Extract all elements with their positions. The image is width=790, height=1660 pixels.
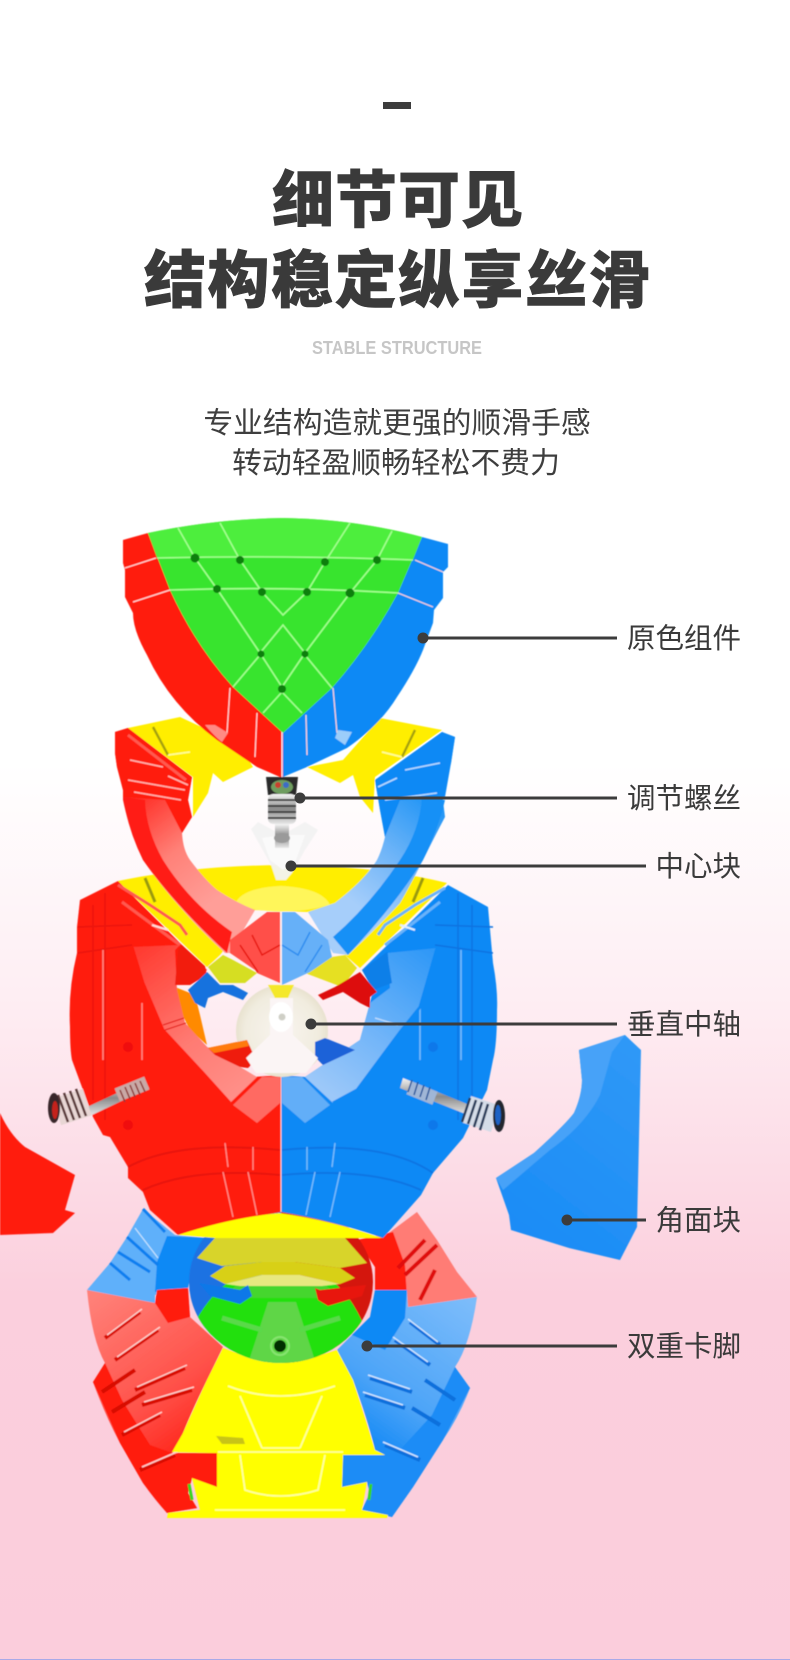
lower centre blocks: [233, 1077, 280, 1123]
right curved band: [305, 948, 437, 1103]
red side: [123, 533, 283, 777]
adjusting screw: [266, 777, 298, 848]
callout: corner block: [562, 1198, 741, 1239]
blue body half: [281, 885, 497, 1238]
yellow top dome: [118, 865, 447, 968]
callout: double clip: 双重卡脚: [627, 1324, 741, 1365]
green face: [148, 518, 422, 733]
blue side: [283, 537, 448, 777]
heading line 1: 细节可见: [272, 150, 524, 240]
red arc: [115, 728, 255, 953]
olive plates: [197, 1238, 367, 1268]
blue clip cross: [188, 972, 248, 1008]
blue upper-left wedge: [87, 1209, 208, 1303]
red head highlights: [128, 760, 188, 800]
yellow left arm: [128, 717, 253, 817]
accent dash: [383, 102, 411, 109]
red body half: [70, 881, 281, 1235]
left screw: [48, 1077, 149, 1125]
blue head highlights: [378, 763, 440, 800]
centre hole: [271, 1337, 289, 1355]
blue arc outer strip: [333, 797, 445, 955]
description line 1: 专业结构造就更强的顺滑手感: [203, 398, 591, 442]
olive bracket left: [208, 955, 257, 983]
yellow lower wedge: [167, 1348, 388, 1518]
red centre block: [230, 912, 280, 983]
description line 2: 转动轻盈顺畅轻松不费力: [232, 438, 560, 482]
orange cavity wall: [175, 987, 207, 1045]
callout: vertical axis: 垂直中轴: [627, 1002, 741, 1043]
right screw: [400, 1078, 505, 1132]
centre block (white tripod): [251, 822, 318, 880]
green junction spots: [190, 554, 381, 693]
callout: corner block: 角面块: [655, 1198, 741, 1239]
callout: double clip: [362, 1324, 741, 1365]
red upper-right wedge: [357, 1212, 477, 1307]
corner block: right blue: [496, 1035, 641, 1260]
bottom tier: lower half: [87, 1200, 477, 1518]
blue wedge: [362, 952, 392, 990]
inner cavity: [188, 1211, 374, 1364]
blue body shading: [435, 893, 493, 1120]
green facet lines: [157, 523, 413, 713]
lower lip shading: [205, 725, 228, 742]
top piece: original colour component: [123, 518, 448, 777]
blue arc: [308, 732, 455, 955]
callout: vertical axis: [306, 1002, 741, 1043]
red arc outer strip: [123, 797, 232, 953]
blue lower-right wedge: [337, 1290, 477, 1517]
blue pin: [315, 1038, 355, 1065]
callout: original colour parts: [418, 616, 741, 657]
red body shading: [78, 893, 132, 1120]
yellow notch shadow: [216, 1436, 245, 1444]
third tier: large body: [70, 865, 497, 1238]
red pin: [208, 1040, 256, 1068]
red clip cross: [318, 972, 377, 1008]
left curved band: [132, 945, 257, 1103]
olive bracket right: [305, 955, 357, 987]
vertical axis hub: [208, 985, 355, 1077]
exploded cube illustration: [0, 518, 641, 1518]
green slit accents: [189, 1484, 371, 1500]
red wedge: [175, 945, 207, 985]
callout: centre block: 中心块: [655, 844, 741, 885]
red lower-left wedge: [87, 1288, 223, 1513]
blue centre block: [282, 912, 332, 985]
english subtitle: STABLE STRUCTURE: [312, 338, 482, 358]
callouts: [286, 616, 741, 1365]
callout: centre block: [286, 844, 741, 885]
blue clip: [199, 1283, 252, 1304]
second tier: middle section: [115, 717, 455, 985]
title block: [144, 102, 652, 482]
yellow arc of bottom tier: [178, 1213, 382, 1238]
green core: [196, 1280, 366, 1370]
olive slits: [145, 878, 423, 902]
red clip: [315, 1285, 366, 1306]
side highlights: [125, 558, 443, 757]
corner block: left red: [0, 1113, 75, 1235]
callout: adjusting screw: 调节螺丝: [627, 776, 741, 817]
heading line 2: 结构稳定纵享丝滑: [144, 230, 652, 320]
olive slits: [153, 727, 415, 757]
yellow right arm: [307, 718, 442, 813]
callout: adjusting screw: [294, 776, 741, 817]
callout: original colour parts: 原色组件: [627, 616, 741, 657]
